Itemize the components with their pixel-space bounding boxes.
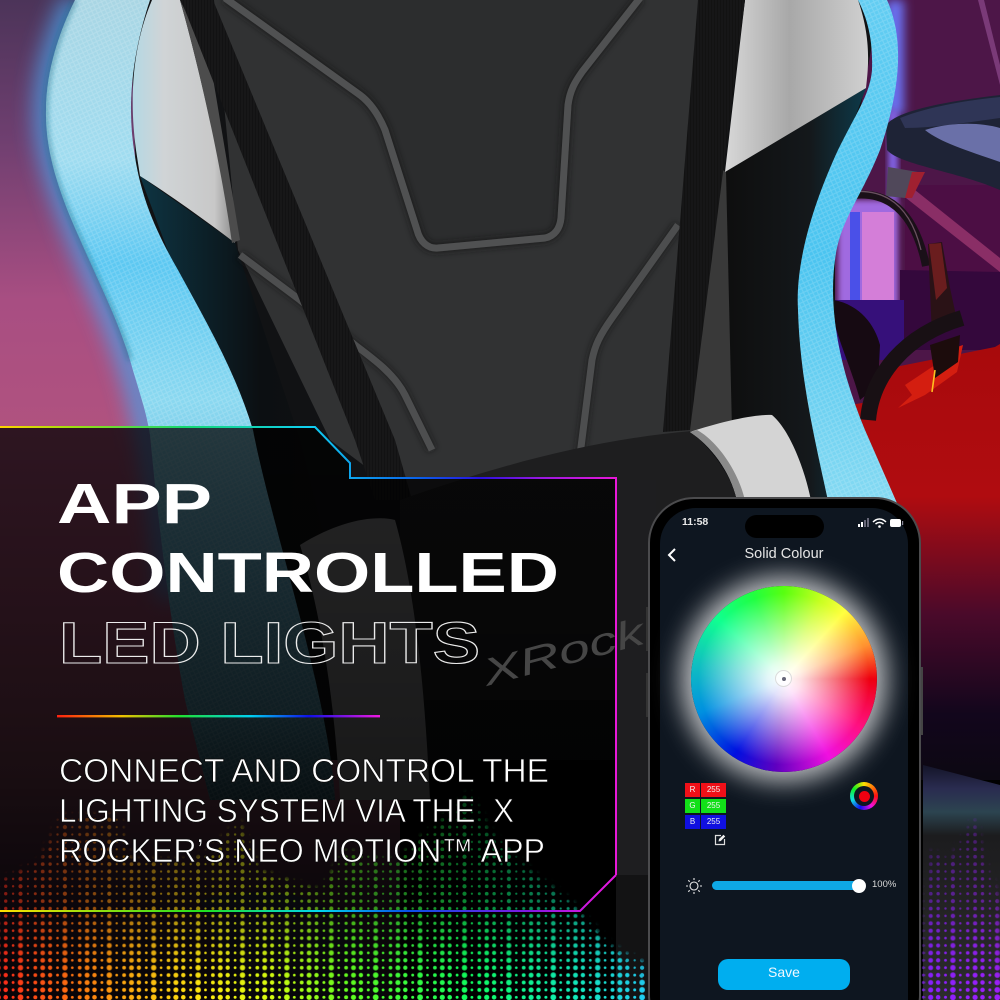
body line 1: CONNECT AND CONTROL THE xyxy=(59,753,549,790)
larger dots along the bottom xyxy=(0,900,1000,1000)
phone body xyxy=(648,497,921,1000)
heading xyxy=(57,472,559,676)
ring red centre xyxy=(858,790,870,802)
status icons xyxy=(858,518,904,528)
seat and floor on the far right xyxy=(923,765,1000,1000)
rainbow frame line: bottom xyxy=(0,875,616,911)
chair: lumbar pillow xyxy=(400,415,811,700)
RGB value table: B xyxy=(690,817,695,826)
brightness slider xyxy=(712,881,862,890)
save button: Save xyxy=(768,964,800,980)
chair back: central leather panel xyxy=(214,0,732,500)
heading line: APP: APP xyxy=(57,472,212,536)
edit icon xyxy=(714,834,726,846)
seat cushions under the text panel xyxy=(200,480,656,1000)
rainbow divider line xyxy=(57,715,380,717)
save button xyxy=(718,959,850,990)
RGB value table: G xyxy=(689,801,696,810)
RGB value table xyxy=(685,783,726,829)
chair: white side panels xyxy=(133,0,868,243)
wheel selector xyxy=(775,670,792,687)
body line 3: ROCKER’S NEO MOTION™ APP xyxy=(59,833,545,870)
chair: illuminated left wing xyxy=(46,0,335,800)
heading line: CONTROLLED: CONTROLLED xyxy=(57,541,559,605)
ring inner dark xyxy=(854,786,874,806)
brightness sun icon xyxy=(686,878,702,894)
selector centre dot xyxy=(782,676,786,680)
rainbow dot equaliser xyxy=(0,790,1000,999)
glow behind the left chair wing xyxy=(46,0,170,600)
dark overlay panel behind the text xyxy=(0,427,616,1000)
RGB value table: 255 xyxy=(707,801,720,810)
back chevron xyxy=(668,548,676,562)
rainbow frame line: top xyxy=(0,427,616,875)
smartphone showing the app xyxy=(646,497,923,1000)
status bar time: 11:58 xyxy=(682,516,708,528)
RGB value table: 255 xyxy=(707,817,720,826)
chair: shoulder straps xyxy=(181,0,745,500)
colour wheel xyxy=(691,586,877,772)
phone screen xyxy=(660,508,908,1000)
RGB value table: R xyxy=(690,785,695,794)
slider knob xyxy=(852,879,866,893)
body line 2: LIGHTING SYSTEM VIA THE X xyxy=(59,793,514,830)
headset hanging on the desk xyxy=(834,191,963,420)
background: room on the right xyxy=(780,0,1000,520)
RGB value table: 255 xyxy=(707,785,720,794)
brightness value: 100% xyxy=(872,879,896,890)
screen title: Solid Colour xyxy=(744,546,824,562)
heading line: LED LIGHTS outlined: LED LIGHTS xyxy=(59,611,480,676)
colour mode ring icon xyxy=(850,782,878,810)
red lit box xyxy=(850,344,1000,780)
dynamic island xyxy=(745,515,824,538)
chair: illuminated right wing xyxy=(798,0,900,510)
dark shade outside the panel at the bottom xyxy=(580,875,650,1000)
desk top on the right xyxy=(886,95,1000,198)
chair back: dark side panels xyxy=(130,0,900,760)
phone side buttons xyxy=(646,607,923,735)
body text xyxy=(59,753,549,870)
background: pink wall on the left xyxy=(0,0,400,1000)
watermark: X Rocker logo on pillow: XRock xyxy=(477,611,652,695)
